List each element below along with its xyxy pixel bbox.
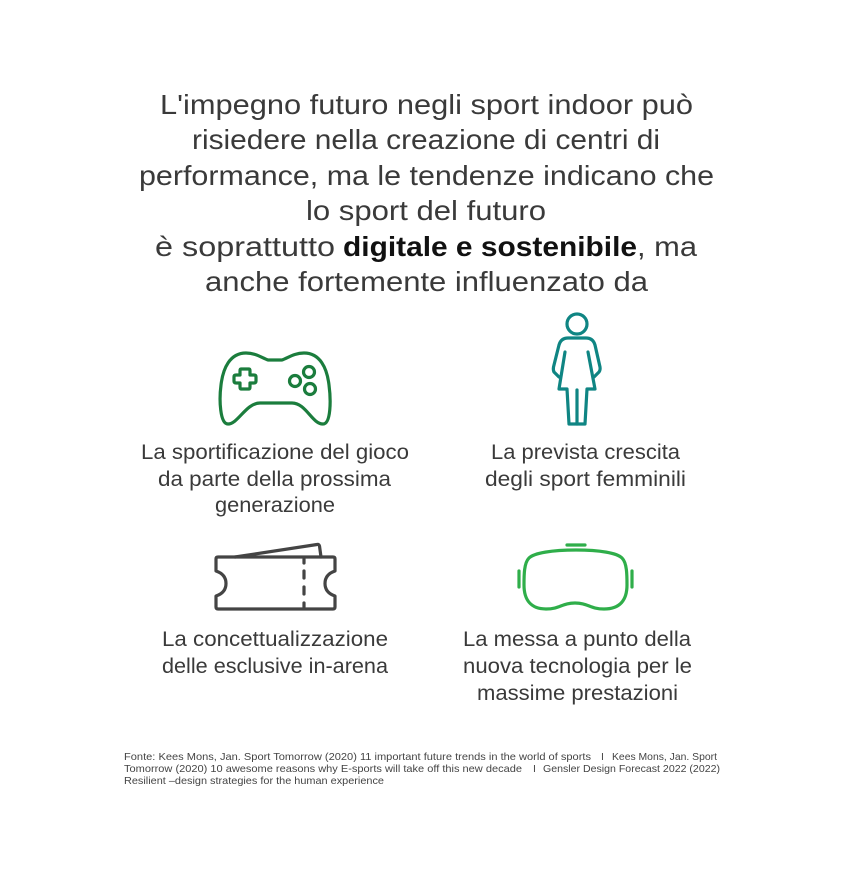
label: sportification of gaming: [141, 441, 409, 517]
label: in-arena exclusives: delle esclusive in-arena: [162, 655, 388, 678]
source note: [124, 751, 720, 787]
title: , ma: [637, 231, 697, 262]
icon: ticket: [216, 544, 335, 609]
label: in-arena exclusives: La concettualizzazione: [162, 628, 388, 651]
icon: woman: [553, 314, 600, 424]
title: risiedere nella creazione di centri di: [192, 124, 660, 155]
label: sportification of gaming: da parte della prossima: [158, 468, 391, 491]
label: growth of women's sports: [485, 441, 686, 491]
title: [139, 89, 714, 297]
label: new technology for performance: nuova tecnologia per le: [463, 655, 692, 678]
label: new technology for performance: massime prestazioni: [477, 682, 678, 705]
icon: VR headset: [519, 545, 632, 609]
label: new technology for performance: La messa a punto della: [463, 628, 691, 651]
title: è soprattutto: [155, 231, 335, 262]
title: performance, ma le tendenze indicano che: [139, 160, 714, 191]
label: growth of women's sports: degli sport femminili: [485, 468, 686, 491]
title: L'impegno futuro negli sport indoor può: [160, 89, 693, 120]
icon: game controller: [220, 353, 330, 424]
source note: Fonte: Kees Mons, Jan. Sport Tomorrow (2020) 11 important future trends in the world of sports: [124, 751, 591, 763]
title: lo sport del futuro: [306, 195, 546, 226]
label: sportification of gaming: La sportificazione del gioco: [141, 441, 409, 464]
label: growth of women's sports: La prevista crescita: [491, 441, 680, 464]
source note: Gensler Design Forecast 2022 (2022): [543, 763, 720, 775]
source note: Kees Mons, Jan. Sport: [612, 751, 717, 763]
label: new technology for performance: [463, 628, 692, 705]
label: sportification of gaming: generazione: [215, 494, 335, 517]
source note: Tomorrow (2020) 10 awesome reasons why E-sports will take off this new decade: [124, 763, 522, 775]
source note: I: [533, 763, 536, 775]
title: anche fortemente influenzato da: [205, 266, 648, 297]
source note: I: [601, 751, 604, 763]
source note: Resilient –design strategies for the human experience: [124, 775, 384, 787]
title: digitale e sostenibile: [343, 231, 637, 262]
label: in-arena exclusives: [162, 628, 388, 678]
